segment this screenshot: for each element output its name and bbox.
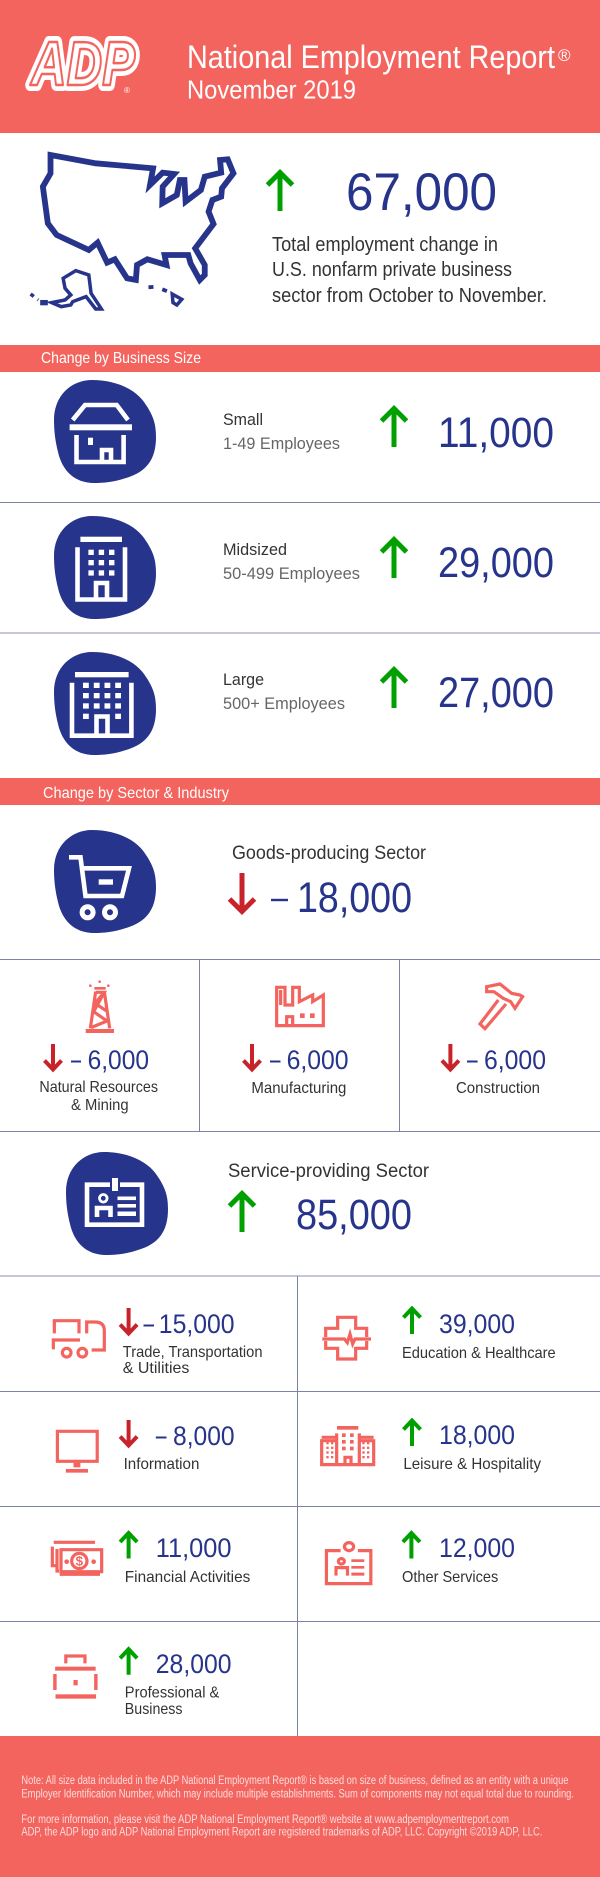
- icon: id badge: [66, 1152, 168, 1255]
- title: ®: [558, 46, 571, 65]
- value: 28,000: [156, 1649, 232, 1679]
- value: 8,000: [173, 1421, 235, 1451]
- service-providing sector: [66, 1152, 430, 1255]
- number: 27,000: [438, 669, 554, 717]
- arrow down: [120, 1308, 137, 1334]
- total description: sector from October to November.: [272, 285, 547, 307]
- value: 6,000: [287, 1045, 349, 1075]
- footer: [0, 1736, 600, 1877]
- total description: Total employment change in: [272, 234, 498, 256]
- value: 6,000: [484, 1045, 546, 1075]
- value: 6,000: [88, 1045, 149, 1075]
- label: & Utilities: [123, 1360, 189, 1377]
- cell: manufacturing: [244, 987, 349, 1097]
- arrow down: [44, 1044, 62, 1070]
- icon: hotel: [322, 1426, 374, 1465]
- icon: hammer: [480, 984, 523, 1029]
- row: small: 1-49 Employees: [223, 434, 340, 453]
- icon: oil derrick: [86, 980, 114, 1033]
- icon: briefcase: [53, 1656, 98, 1699]
- subtitle: November 2019: [187, 74, 356, 104]
- icon: money: $: [76, 1554, 84, 1569]
- label: small: Small: [223, 410, 263, 429]
- value: 18,000: [439, 1420, 515, 1450]
- value: 39,000: [439, 1309, 515, 1339]
- icon: medical cross: [322, 1317, 371, 1359]
- label: [123, 1344, 262, 1377]
- label: Trade, Transportation: [123, 1344, 262, 1361]
- label: Business: [125, 1701, 182, 1718]
- icon: id card: [326, 1543, 371, 1584]
- band: sector and industry: Change by Sector & Industry: [43, 785, 229, 802]
- row: large: [54, 652, 554, 755]
- value: 15,000: [159, 1309, 235, 1339]
- label: Manufacturing: [251, 1080, 346, 1097]
- cell: education: [322, 1308, 556, 1362]
- title: National Employment Report: [187, 39, 555, 75]
- icon: mid building: [54, 516, 156, 619]
- label: large: Large: [223, 670, 264, 689]
- row: midsized: [54, 516, 554, 619]
- band: business size: [0, 345, 600, 372]
- band: sector and industry: [0, 778, 600, 805]
- arrow up: [120, 1649, 137, 1675]
- footnote text: For more information, please visit the ADP National Employment Report® website at www.adpemploymentreport.com: [21, 1814, 509, 1826]
- label: & Mining: [71, 1097, 129, 1114]
- icon: large building: [54, 652, 156, 755]
- label: Construction: [456, 1080, 540, 1097]
- row: large: 500+ Employees: [223, 694, 345, 713]
- grid lines: goods: [0, 959, 600, 1132]
- cell: natural resources: [39, 980, 158, 1114]
- arrow up: [404, 1308, 420, 1334]
- number: 11,000: [438, 409, 554, 457]
- grid lines: services: [0, 1275, 600, 1736]
- icon: small store: [54, 380, 156, 483]
- arrow down: [244, 1044, 260, 1070]
- cell: information: [57, 1420, 235, 1473]
- arrow down: [230, 873, 254, 912]
- icon: cart: [54, 830, 156, 933]
- value: 18,000: [297, 874, 412, 922]
- heading: Service-providing Sector: [228, 1161, 430, 1182]
- arrow up: [403, 1533, 420, 1558]
- label: Education & Healthcare: [402, 1345, 556, 1362]
- heading: Goods-producing Sector: [232, 843, 427, 864]
- value: 12,000: [439, 1533, 515, 1563]
- icon: truck: [53, 1321, 104, 1357]
- cell: construction: [442, 984, 546, 1097]
- cell: leisure: [322, 1420, 541, 1473]
- value: 85,000: [296, 1191, 412, 1239]
- row: small: [54, 380, 554, 483]
- cell: other services: [326, 1533, 515, 1586]
- ADP logo: ®: [124, 86, 130, 95]
- arrow up: [230, 1194, 254, 1232]
- cell: trade: [53, 1308, 262, 1377]
- arrow up: [382, 670, 406, 708]
- header band: [0, 0, 600, 133]
- number: 29,000: [438, 539, 554, 587]
- arrow up: [382, 540, 406, 578]
- arrow down: [442, 1044, 459, 1070]
- total number: 67,000: [346, 163, 497, 222]
- band: business size: Change by Business Size: [41, 350, 201, 367]
- label: Information: [124, 1456, 199, 1473]
- arrow down: [120, 1420, 137, 1446]
- label: Other Services: [402, 1569, 498, 1586]
- icon: US map: [31, 155, 233, 309]
- ADP logo: ADP: [29, 30, 136, 99]
- arrow: total up: [268, 172, 292, 211]
- goods-producing sector: [54, 830, 427, 933]
- label: [125, 1685, 220, 1718]
- cell: financial: [52, 1533, 250, 1586]
- arrow up: [382, 408, 406, 447]
- row: midsized: 50-499 Employees: [223, 564, 360, 583]
- arrow up: [120, 1533, 137, 1558]
- ADP logo: ADP: [29, 30, 136, 99]
- footnote text: [21, 1775, 574, 1839]
- value: 11,000: [156, 1533, 232, 1563]
- label: Professional &: [125, 1685, 220, 1702]
- label: Natural Resources: [39, 1079, 158, 1096]
- icon: money: [52, 1542, 102, 1574]
- label: Leisure & Hospitality: [403, 1456, 541, 1473]
- label: [39, 1079, 158, 1114]
- arrow up: [404, 1420, 420, 1446]
- label: midsized: Midsized: [223, 540, 287, 559]
- icon: factory: [277, 987, 323, 1026]
- icon: monitor: [57, 1431, 97, 1473]
- total description: [272, 234, 547, 307]
- total description: U.S. nonfarm private business: [272, 259, 512, 281]
- cell: professional: [53, 1649, 231, 1718]
- label: Financial Activities: [125, 1569, 250, 1586]
